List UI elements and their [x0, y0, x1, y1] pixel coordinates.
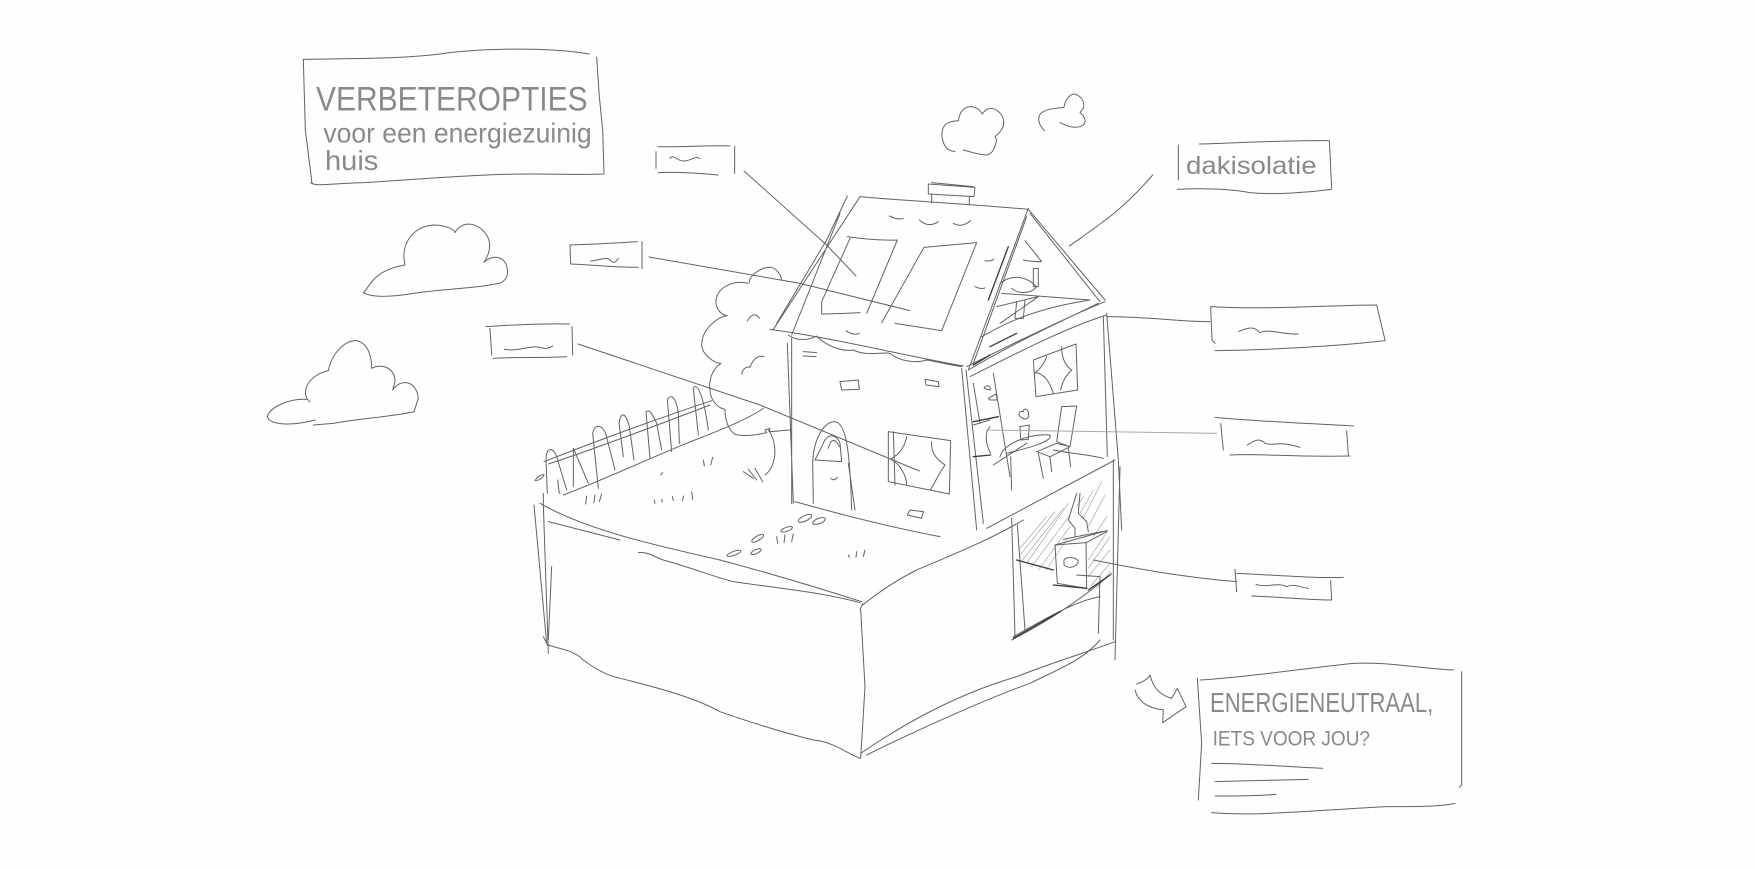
leader lines to right labels — [987, 430, 1237, 582]
basement floor — [1012, 573, 1112, 640]
garden block — [534, 387, 940, 758]
cloud: upper left — [363, 224, 507, 296]
title subtitle: voor een energiezuinig — [323, 118, 592, 149]
living room walls — [962, 313, 1122, 530]
tree — [702, 267, 790, 435]
label: middle left blank — [570, 242, 642, 269]
wall hatching — [1020, 482, 1110, 588]
label: right top blank with leader — [1107, 305, 1385, 351]
chimney — [928, 183, 975, 205]
title box — [303, 49, 604, 185]
callout subheading: IETS VOOR JOU? — [1213, 726, 1370, 750]
cloud: top right — [1039, 94, 1085, 131]
dark pencil accents — [973, 247, 1017, 457]
grass tufts — [586, 457, 865, 557]
callout placeholder text lines — [1212, 763, 1323, 796]
leader lines to left labels — [578, 171, 919, 471]
label: lower left blank — [486, 324, 573, 358]
solar panels — [822, 237, 977, 331]
label: dakisolatie — [1177, 141, 1332, 194]
fence — [535, 387, 763, 495]
front window — [888, 432, 951, 494]
front wall — [787, 338, 939, 518]
label: right lower blank — [1235, 569, 1343, 600]
label: right middle blank — [1215, 417, 1353, 456]
cloud: top middle — [942, 107, 1004, 155]
radiator — [984, 386, 997, 453]
title subtitle second line: huis — [325, 145, 378, 176]
callout heading: ENERGIENEUTRAAL, — [1210, 687, 1433, 718]
tree trunk and grass — [743, 430, 775, 482]
label: top left blank — [656, 146, 735, 175]
ground block right side — [861, 520, 1115, 755]
front door — [813, 422, 855, 510]
house — [770, 183, 1122, 530]
table, flower, chair — [993, 406, 1077, 490]
arrow pointing to callout — [1135, 675, 1186, 723]
callout: energieneutraal — [1197, 663, 1462, 814]
attic furniture — [997, 241, 1090, 323]
title heading: VERBETEROPTIES — [316, 81, 588, 119]
boiler — [1055, 493, 1107, 588]
leader line to roof insulation label — [1069, 175, 1153, 246]
ground block front — [534, 493, 940, 758]
label text: dakisolatie — [1186, 153, 1317, 180]
basement walls — [1012, 460, 1120, 660]
roof — [770, 196, 1028, 367]
living room window — [1033, 344, 1078, 397]
stepping stones — [726, 513, 826, 558]
cloud: lower left — [267, 341, 418, 425]
attic gable — [967, 208, 1105, 370]
dark basement accents — [1013, 560, 1110, 638]
basement room — [1012, 460, 1120, 660]
